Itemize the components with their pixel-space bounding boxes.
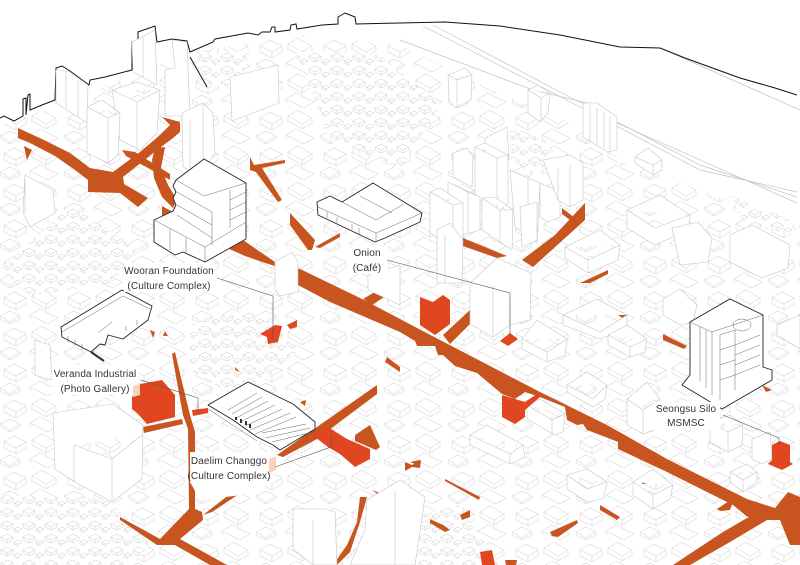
road: north-west avenue bbox=[18, 117, 180, 207]
label: Onion: (Café) bbox=[353, 263, 381, 274]
road fragments bbox=[150, 330, 155, 338]
red plot: gallery entrance bbox=[192, 408, 208, 416]
leader line: Wooran Foundation bbox=[217, 278, 273, 340]
red building: mid block bbox=[502, 392, 540, 424]
red plot: south block bbox=[480, 550, 495, 565]
label: Veranda Industrial: (Photo Gallery) bbox=[60, 384, 130, 395]
building: Onion cafe bbox=[317, 183, 422, 242]
label: Seongsu Silo: Seongsu Silo bbox=[656, 404, 716, 415]
road: south-west avenue bbox=[120, 352, 227, 565]
red block: Veranda Industrial bbox=[132, 380, 175, 424]
label: Onion: Onion bbox=[353, 248, 381, 259]
red building: Onion bbox=[420, 295, 450, 335]
label: Seongsu Silo: MSMSC bbox=[667, 418, 705, 429]
label backing shapes bbox=[52, 245, 720, 500]
label: Daelim Changgo: (Culture Complex) bbox=[187, 471, 271, 482]
river bank lines bbox=[400, 25, 800, 203]
skyline outline bbox=[0, 13, 797, 121]
road: central side street bbox=[250, 157, 285, 202]
building: Wooran Foundation bbox=[154, 159, 246, 262]
leader line: Seongsu Silo bbox=[723, 415, 779, 445]
road: diagonal near Daelim bbox=[277, 385, 377, 457]
building: Daelim Changgo bbox=[208, 382, 315, 450]
building: Seongsu Silo bbox=[682, 299, 772, 409]
leader line: Onion bbox=[387, 260, 510, 335]
label: Wooran Foundation: Wooran Foundation bbox=[124, 266, 214, 277]
red block: Daelim Changgo bbox=[315, 427, 370, 467]
label: Wooran Foundation: (Culture Complex) bbox=[127, 281, 211, 292]
leader line: Veranda Industrial bbox=[141, 380, 198, 411]
label: Daelim Changgo: Daelim Changgo bbox=[191, 456, 267, 467]
road: north-east branches bbox=[522, 203, 585, 267]
road: main diagonal bbox=[227, 240, 275, 266]
red building: Seongsu Silo bbox=[768, 441, 793, 470]
label: Veranda Industrial: Veranda Industrial bbox=[54, 369, 136, 380]
leader line: Daelim Changgo bbox=[275, 435, 331, 467]
red plot: Onion site bbox=[500, 333, 518, 346]
road network bbox=[18, 117, 800, 565]
building: Veranda Industrial bbox=[61, 290, 152, 361]
red cultural sites bbox=[132, 295, 793, 565]
red plot: Wooran Foundation bbox=[260, 325, 282, 344]
